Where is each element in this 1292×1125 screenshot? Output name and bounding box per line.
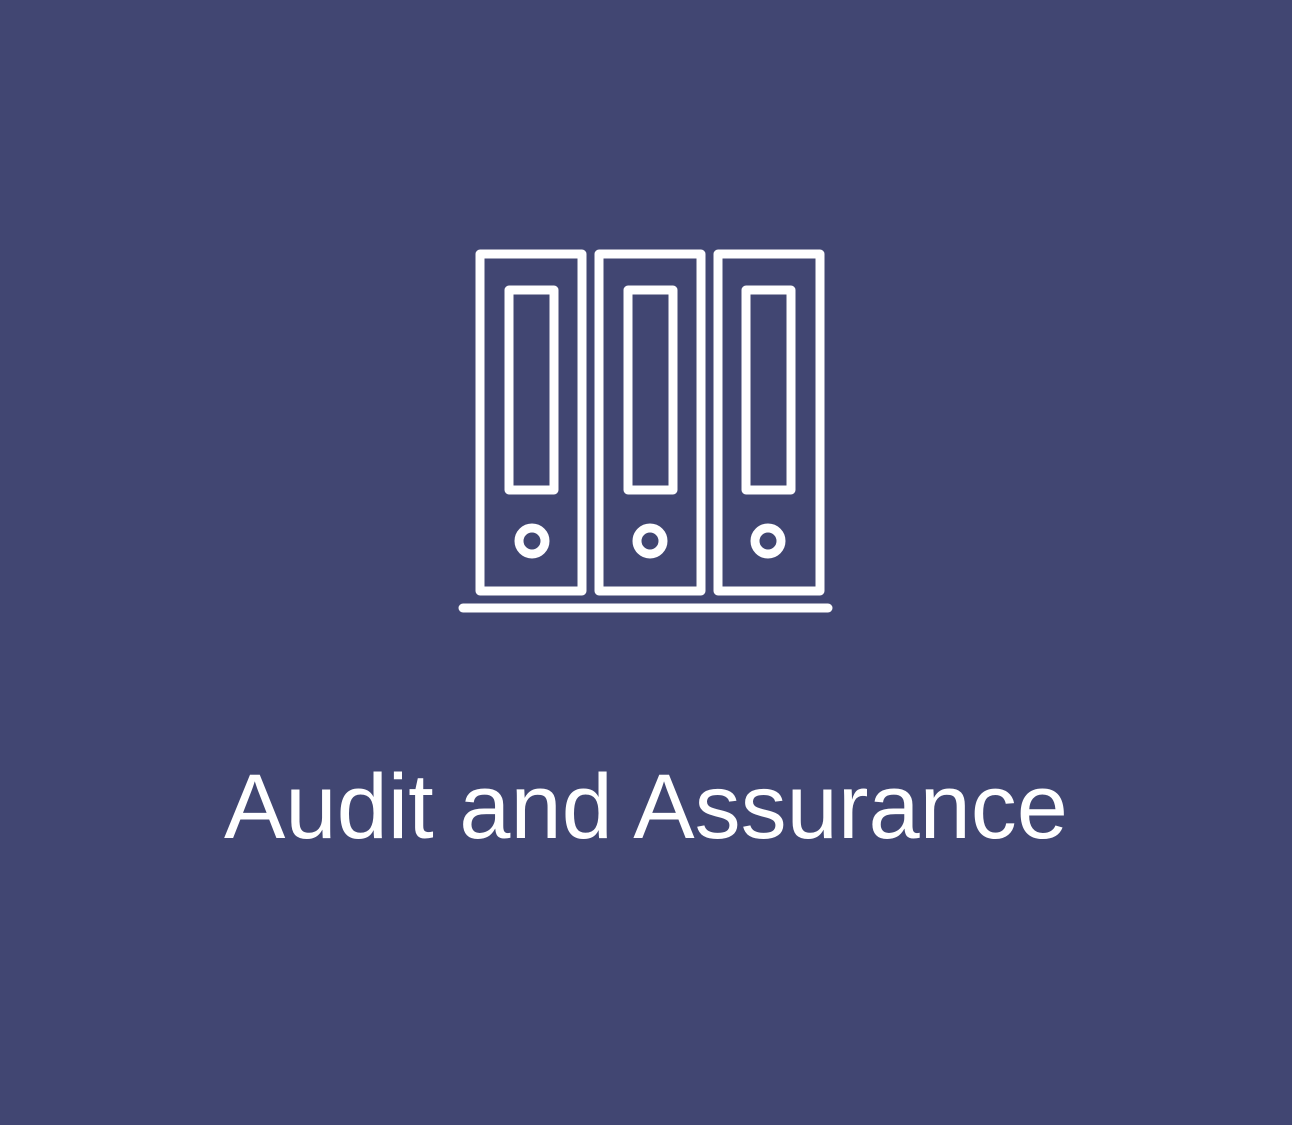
binder 3 — [718, 254, 820, 591]
title: Audit and Assurance — [224, 756, 1068, 858]
binder 1 — [480, 254, 582, 591]
shelf — [463, 604, 828, 612]
binder 2 — [599, 254, 701, 591]
